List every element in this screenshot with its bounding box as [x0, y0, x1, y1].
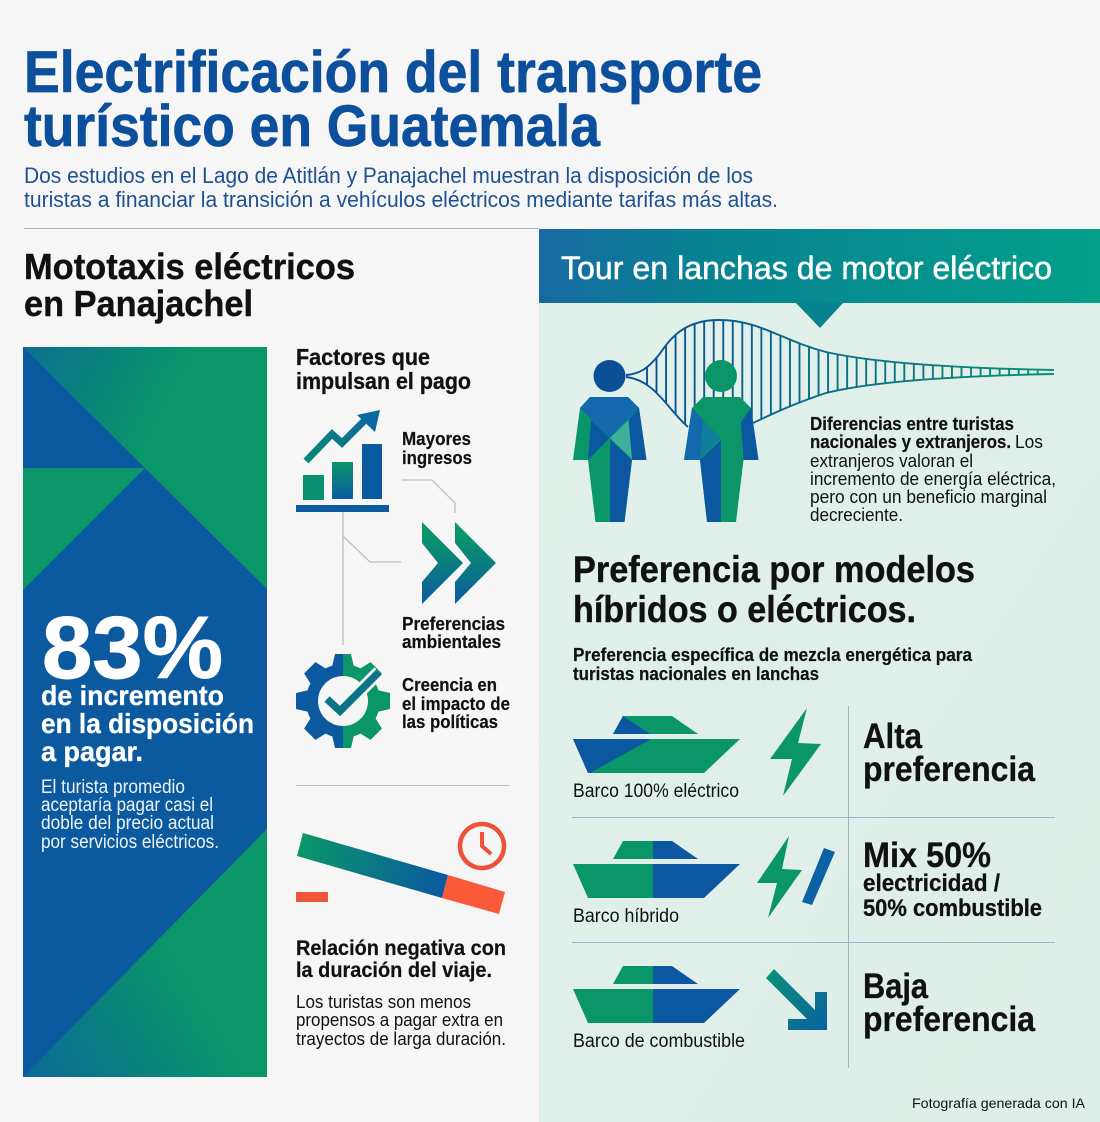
- text: relacion negativa: [296, 937, 506, 1049]
- label: mayores ingresos: [402, 429, 472, 468]
- result: alta: [863, 717, 1035, 789]
- text: relacion negativa: Los turistas son menos: [296, 991, 471, 1012]
- text: diferencias: [810, 414, 1056, 525]
- chart: diminishing wave: [626, 319, 1054, 428]
- label: creencia: el impacto de: [402, 694, 510, 714]
- panel: right background: [539, 229, 1100, 1122]
- result: mix: 50% combustible: [863, 895, 1042, 922]
- subtitle: Dos estudios en el Lago de Atitlán y Panajachel muestran la disposición de los: [24, 163, 753, 188]
- text: relacion negativa: trayectos de larga duración.: [296, 1028, 506, 1049]
- label: electric boat: Barco 100% eléctrico: [573, 781, 739, 802]
- label: creencia: [402, 675, 510, 732]
- label: creencia: Creencia en: [402, 675, 497, 695]
- big number: 83%: [42, 598, 223, 697]
- icon: hybrid boat: [573, 841, 740, 898]
- icon: chevrons: [422, 522, 496, 604]
- heading: factores: impulsan el pago: [296, 368, 471, 394]
- text: diferencias: Diferencias entre turistas: [810, 414, 1014, 434]
- result: alta: Alta: [863, 717, 922, 756]
- text: diferencias: Los: [1015, 432, 1043, 452]
- text: diferencias: extranjeros valoran el: [810, 451, 973, 471]
- result: baja: preferencia: [863, 1000, 1035, 1039]
- icon: person foreign: [684, 360, 758, 522]
- statement: [41, 680, 254, 767]
- row: electric boat: [573, 708, 1035, 802]
- icon: person national: [573, 360, 646, 522]
- subtitle: turistas a financiar la transición a vehículos eléctricos mediante tarifas más altas.: [24, 187, 778, 212]
- description: [41, 777, 219, 853]
- credit: Fotografía generada con IA: [912, 1095, 1086, 1111]
- result: alta: preferencia: [863, 750, 1035, 789]
- subheading: mezcla: turistas nacionales en lanchas: [573, 664, 819, 684]
- heading: factores: Factores que: [296, 344, 430, 370]
- subtitle: [24, 163, 778, 212]
- row: hybrid boat: [573, 836, 1042, 927]
- text: diferencias: decreciente.: [810, 505, 903, 525]
- heading: preferencia: Preferencia por modelos: [573, 549, 975, 590]
- label: mayores ingresos: ingresos: [402, 448, 472, 468]
- header band: tour: [539, 229, 1100, 328]
- icon: gear with check: [296, 654, 390, 748]
- icon: bolt and fuel bar: [757, 836, 835, 918]
- heading: mototaxis: Mototaxis eléctricos: [24, 246, 355, 287]
- text: diferencias: nacionales y extranjeros.: [810, 432, 1011, 452]
- label: fuel boat: Barco de combustible: [573, 1031, 745, 1052]
- icon: clock: [460, 824, 504, 868]
- label: preferencias ambientales: Preferencias: [402, 614, 505, 634]
- text: diferencias: pero con un beneficio marginal: [810, 487, 1047, 507]
- result: mix: electricidad /: [863, 870, 1000, 897]
- result: baja: [863, 967, 1035, 1039]
- description: por servicios eléctricos.: [41, 832, 219, 853]
- statement: de incremento: [41, 680, 224, 711]
- heading: mototaxis: en Panajachel: [24, 283, 253, 324]
- heading: preferencia: [573, 549, 975, 630]
- description: aceptaría pagar casi el: [41, 795, 213, 816]
- icon: income chart: [296, 410, 389, 512]
- connector lines: [343, 480, 455, 645]
- chart: negative slope bar: [296, 833, 505, 914]
- description: doble del precio actual: [41, 813, 214, 834]
- icon: down arrow: [766, 969, 827, 1030]
- text: relacion negativa: Relación negativa con: [296, 937, 506, 960]
- statement: a pagar.: [41, 736, 143, 767]
- label: hybrid boat: Barco híbrido: [573, 906, 679, 927]
- label: creencia: las políticas: [402, 712, 498, 732]
- subheading: mezcla: [573, 645, 973, 684]
- heading: factores: [296, 344, 471, 394]
- statement: en la disposición: [41, 708, 254, 739]
- icon: bolt: [770, 708, 821, 796]
- title: [24, 40, 762, 159]
- icon: fuel boat: [573, 966, 740, 1023]
- label: preferencias ambientales: [402, 614, 505, 652]
- label: preferencias ambientales: ambientales: [402, 632, 501, 652]
- result: baja: Baja: [863, 967, 928, 1006]
- result: mix: Mix 50%: [863, 836, 991, 875]
- text: relacion negativa: la duración del viaje.: [296, 959, 492, 982]
- row: fuel boat: [573, 966, 1035, 1052]
- heading: preferencia: híbridos o eléctricos.: [573, 589, 916, 630]
- text: relacion negativa: propensos a pagar extra en: [296, 1009, 503, 1030]
- description: El turista promedio: [41, 777, 185, 798]
- title: turístico en Guatemala: [24, 94, 601, 159]
- icon: electric boat: [573, 716, 740, 773]
- header band: tour: Tour en lanchas de motor eléctrico: [561, 250, 1052, 286]
- result: mix: [863, 836, 1042, 922]
- panel: 83 percent: [23, 347, 267, 1077]
- heading: mototaxis: [24, 246, 355, 324]
- label: mayores ingresos: Mayores: [402, 429, 471, 449]
- text: diferencias: incremento de energía eléctrica,: [810, 469, 1056, 489]
- subheading: mezcla: Preferencia específica de mezcla energética para: [573, 645, 973, 665]
- title: Electrificación del transporte: [24, 40, 762, 105]
